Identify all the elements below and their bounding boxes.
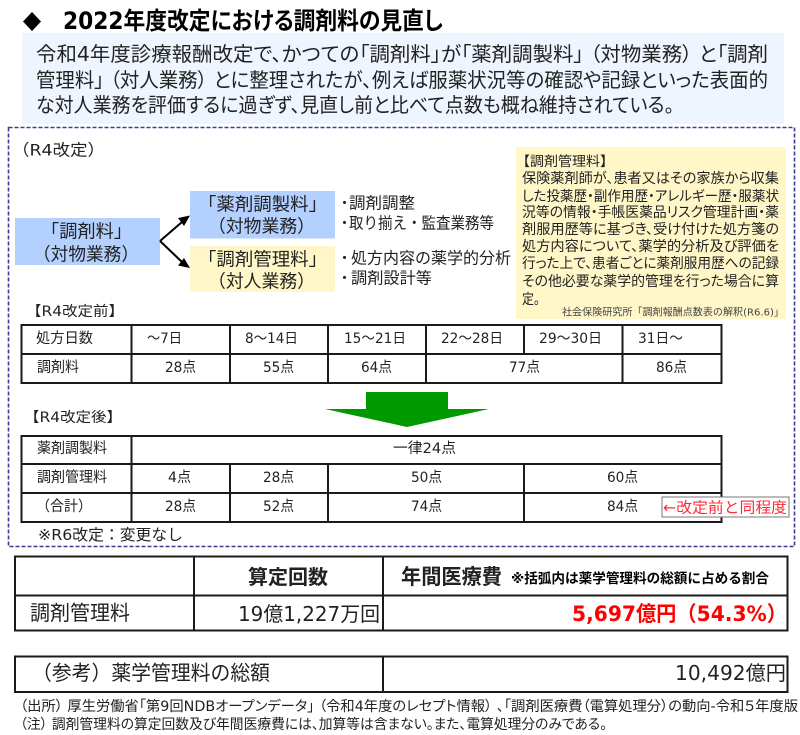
- panel: dispensing management fee definition: その他必要な薬学的管理を行った場合に算: [522, 274, 779, 290]
- table: after R4 revision: 60点: [607, 469, 638, 486]
- panel: summary text: [22, 33, 784, 124]
- text: person-task bullets: 処方内容の薬学的分析: [351, 248, 511, 268]
- table: count and annual cost: ※括弧内は薬学管理料の総額に占める割合: [511, 570, 770, 587]
- table: before R4 revision: [22, 325, 722, 383]
- text: object-task bullets: 調剤調整: [349, 194, 415, 212]
- panel: summary text: な対人業務を評価するに過ぎず、見直し前と比べて点数も概ね維持されている。: [36, 93, 674, 117]
- table: before R4 revision: 28点: [165, 359, 196, 376]
- table: total pharmaceutical management fee: （参考）薬学管理料の総額: [32, 661, 270, 685]
- box: dispensing fee: 「調剤料」: [41, 222, 132, 242]
- text: person-task bullets: ・: [337, 249, 352, 267]
- panel: R4 revision dashed frame: [8, 128, 794, 546]
- table: after R4 revision: 調剤管理料: [37, 468, 107, 486]
- table: before R4 revision: 31日～: [638, 331, 683, 347]
- panel: dispensing management fee definition: 行った上で、患者ごとに薬剤服用歴への記録: [522, 256, 779, 272]
- text: person-task bullets: ・: [337, 269, 352, 287]
- table: after R4 revision: 一律24点: [393, 440, 456, 457]
- callout: same level as before revision: ←改定前と同程度: [663, 498, 787, 516]
- box: dispensing management fee: （対人業務）: [208, 272, 315, 292]
- heading: after R4: 【R4改定後】: [24, 410, 122, 426]
- text: person-task bullets: 調剤設計等: [351, 268, 432, 288]
- heading: before R4: 【R4改定前】: [26, 303, 124, 320]
- panel: dispensing management fee definition: 処方内容について、薬学的分析及び評価を: [522, 238, 779, 255]
- table: before R4 revision: 55点: [263, 359, 294, 376]
- title: 2022年度改定における調剤料の見直し: [63, 7, 443, 35]
- box: dispensing fee: （対物業務）: [33, 244, 139, 266]
- table: total pharmaceutical management fee: 10,492億円: [675, 661, 786, 685]
- table: before R4 revision: ～7日: [147, 331, 182, 347]
- table: before R4 revision: 86点: [656, 359, 687, 376]
- table: before R4 revision: 64点: [361, 359, 392, 376]
- note: R6 unchanged: ※R6改定：変更なし: [38, 526, 183, 544]
- table: count and annual cost: 調剤管理料: [30, 601, 130, 625]
- table: before R4 revision: 15～21日: [344, 331, 406, 347]
- table: before R4 revision: 8～14日: [245, 331, 298, 347]
- box: dispensing management fee: 「調剤管理料」: [198, 250, 327, 270]
- table: after R4 revision: 50点: [411, 469, 442, 486]
- table: count and annual cost: [15, 556, 788, 630]
- footnotes: （注） 調剤管理料の算定回数及び年間医療費には、加算等は含まない。また、電算処理分のみである。: [20, 716, 607, 733]
- text: object-task bullets: ・: [337, 194, 352, 212]
- table: after R4 revision: 52点: [263, 498, 294, 515]
- table: after R4 revision: 薬剤調製料: [37, 440, 107, 457]
- box: drug preparation fee: （対物業務）: [208, 216, 315, 238]
- panel: summary text: 令和4年度診療報酬改定で、かつての「調剤料」が「薬剤調製料」 （対物業務） と「調剤: [36, 42, 768, 66]
- heading: R4 revision: （R4改定）: [12, 140, 105, 160]
- table: total pharmaceutical management fee: [15, 656, 788, 692]
- table: after R4 revision: 84点: [607, 498, 638, 515]
- text: object-task bullets: ・: [337, 214, 352, 232]
- table: after R4 revision: 74点: [411, 498, 442, 515]
- arrows: branch: [160, 216, 190, 268]
- panel: dispensing management fee definition: 【調剤管理料】: [516, 154, 614, 170]
- text: person-task bullets: [337, 248, 511, 288]
- table: count and annual cost: 5,697億円（54.3%）: [572, 602, 787, 626]
- table: after R4 revision: [22, 436, 722, 522]
- panel: dispensing management fee definition: 定。: [522, 292, 546, 308]
- table: after R4 revision: （合計）: [36, 498, 92, 515]
- box: drug preparation fee: 「薬剤調製料」: [198, 194, 327, 216]
- table: before R4 revision: 処方日数: [36, 330, 93, 347]
- table: after R4 revision: 4点: [168, 469, 191, 486]
- box: drug preparation fee: [190, 191, 335, 238]
- table: after R4 revision: 28点: [263, 469, 294, 486]
- text: object-task bullets: [337, 194, 494, 232]
- table: count and annual cost: 19億1,227万回: [238, 602, 380, 626]
- table: count and annual cost: 年間医療費: [401, 565, 502, 589]
- table: after R4 revision: 28点: [165, 498, 196, 515]
- panel: summary text: 管理料」 （対人業務） とに整理されたが、例えば服薬状況等の確認や記録といった表面的: [36, 68, 768, 92]
- table: before R4 revision: 調剤料: [37, 359, 79, 376]
- footnotes: [20, 698, 798, 733]
- panel: dispensing management fee definition: 況等の情報・手帳医薬品リスク管理計画・薬: [522, 204, 779, 221]
- panel: dispensing management fee definition: [516, 147, 786, 319]
- panel: dispensing management fee definition: 剤服用歴等に基づき、受け付けた処方箋の: [522, 221, 779, 238]
- footnotes: （出所） 厚生労働省「第9回NDBオープンデータ」 （令和4年度のレセプト情報） 、「調剤医療費（電算処理分）の動向-令和５年度版: [20, 698, 798, 715]
- text: object-task bullets: 取り揃え・監査業務等: [349, 214, 494, 232]
- table: count and annual cost: 算定回数: [248, 565, 328, 589]
- box: dispensing management fee: [190, 246, 335, 292]
- arrow: green down: [325, 392, 489, 427]
- table: before R4 revision: 29～30日: [539, 331, 602, 347]
- panel: dispensing management fee definition: 社会保険研究所「調剤報酬点数表の解釈(R6.6)」: [562, 306, 784, 318]
- box: dispensing fee: [15, 218, 160, 266]
- table: before R4 revision: 22～28日: [441, 331, 503, 347]
- panel: dispensing management fee definition: 保険薬剤師が、患者又はその家族から収集: [522, 170, 779, 187]
- panel: dispensing management fee definition: した投薬歴・副作用歴・アレルギー歴・服薬状: [522, 189, 779, 205]
- table: before R4 revision: 77点: [509, 359, 540, 376]
